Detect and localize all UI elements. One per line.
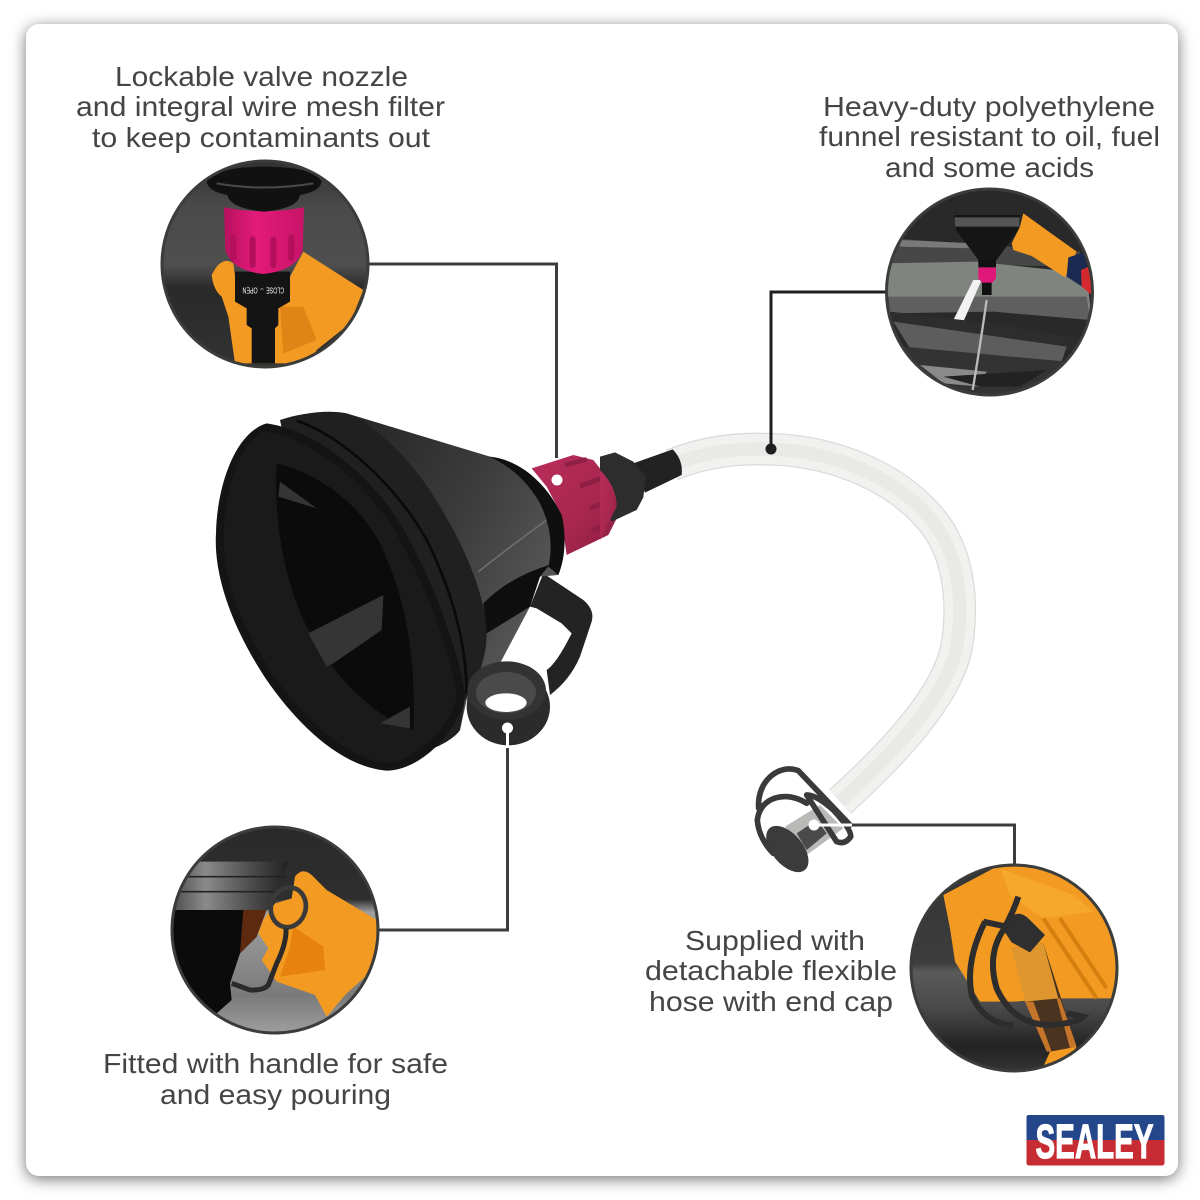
rim band ridge xyxy=(297,421,467,693)
inset: handle grip xyxy=(170,826,380,1034)
pink collar xyxy=(224,207,304,274)
funnel silver rim xyxy=(170,862,288,910)
funnel handle xyxy=(530,573,592,695)
product: funnel xyxy=(216,412,619,771)
hood panel xyxy=(893,322,1067,362)
text: detachable hose: Supplied with xyxy=(685,925,865,956)
clear tube xyxy=(1012,943,1077,1052)
funnel black body xyxy=(167,910,257,1013)
text: detachable hose xyxy=(645,925,897,1017)
neck ridge xyxy=(490,457,565,575)
text: lockable valve nozzle: Lockable valve nozzle xyxy=(115,61,408,92)
leader line: end cap inset xyxy=(814,825,1014,865)
black threaded nut xyxy=(600,452,646,522)
underside shadow xyxy=(483,565,549,633)
finger ring handle xyxy=(467,661,550,745)
black trumpet top xyxy=(207,167,322,212)
anchor dot: hose xyxy=(766,444,776,454)
cap head xyxy=(1003,914,1045,952)
black hose connector xyxy=(633,449,682,493)
handle stem xyxy=(232,928,286,990)
inset: funnel over car engine xyxy=(880,180,1100,400)
text: lockable valve nozzle: to keep contaminants out xyxy=(92,122,430,153)
cone highlight xyxy=(478,520,547,572)
anchor dot: valve collar xyxy=(552,474,562,486)
inset: end cap xyxy=(910,864,1118,1072)
wiper and scuttle xyxy=(890,312,964,322)
valve collar xyxy=(532,455,619,555)
text: handle: and easy pouring xyxy=(160,1079,391,1110)
cone body xyxy=(347,413,563,753)
text: heavy-duty polyethylene funnel xyxy=(819,91,1160,183)
leader line: hose inset to tube xyxy=(771,292,886,449)
cap strap loops xyxy=(757,769,851,853)
leader line: handle inset to finger ring xyxy=(379,728,508,930)
orange glove xyxy=(258,871,377,1017)
engine bay xyxy=(904,347,1063,394)
windshield xyxy=(888,262,1090,312)
glass end of tube xyxy=(785,805,843,855)
text: heavy-duty polyethylene funnel: and some acids xyxy=(885,152,1094,183)
strap xyxy=(970,897,1083,1026)
hose xyxy=(973,300,987,390)
text: lockable valve nozzle xyxy=(76,61,445,153)
text: handle xyxy=(103,1048,448,1110)
text: detachable hose: detachable flexible xyxy=(645,955,897,986)
interior reflections xyxy=(278,482,410,728)
orange glove xyxy=(212,252,363,363)
product: flexible hose and end cap xyxy=(600,449,960,880)
funnel xyxy=(954,215,1020,260)
funnel inner cone xyxy=(276,463,414,730)
car roof band xyxy=(887,238,1080,267)
collar edge xyxy=(600,470,617,540)
rim band xyxy=(280,412,487,771)
valve text: CLOSE ⇔ OPEN xyxy=(242,285,284,294)
end cap disc xyxy=(758,818,817,880)
handle ring xyxy=(268,885,308,930)
collar ribs xyxy=(565,459,611,531)
pink valve xyxy=(978,267,996,283)
leader line: nozzle inset to valve collar xyxy=(369,264,556,480)
funnel inner wall xyxy=(224,432,457,763)
glove and sleeve xyxy=(1012,213,1077,277)
text: handle: Fitted with handle for safe xyxy=(103,1048,448,1079)
anchor dot: finger ring xyxy=(502,722,513,734)
glove at bottom xyxy=(1044,1046,1077,1065)
nozzle lower body xyxy=(235,272,290,363)
text: lockable valve nozzle: and integral wire mesh filter xyxy=(76,91,445,122)
hose tube xyxy=(672,449,960,802)
text: heavy-duty polyethylene funnel: Heavy-duty polyethylene xyxy=(823,91,1155,122)
text: detachable hose: hose with end cap xyxy=(649,986,893,1017)
inset: valve nozzle xyxy=(160,160,370,368)
text: heavy-duty polyethylene funnel: funnel resistant to oil, fuel xyxy=(819,121,1160,152)
rim outer xyxy=(216,423,465,771)
orange glove xyxy=(943,867,1117,1002)
anchor dot: end cap xyxy=(808,820,820,830)
collar grips xyxy=(233,237,291,265)
